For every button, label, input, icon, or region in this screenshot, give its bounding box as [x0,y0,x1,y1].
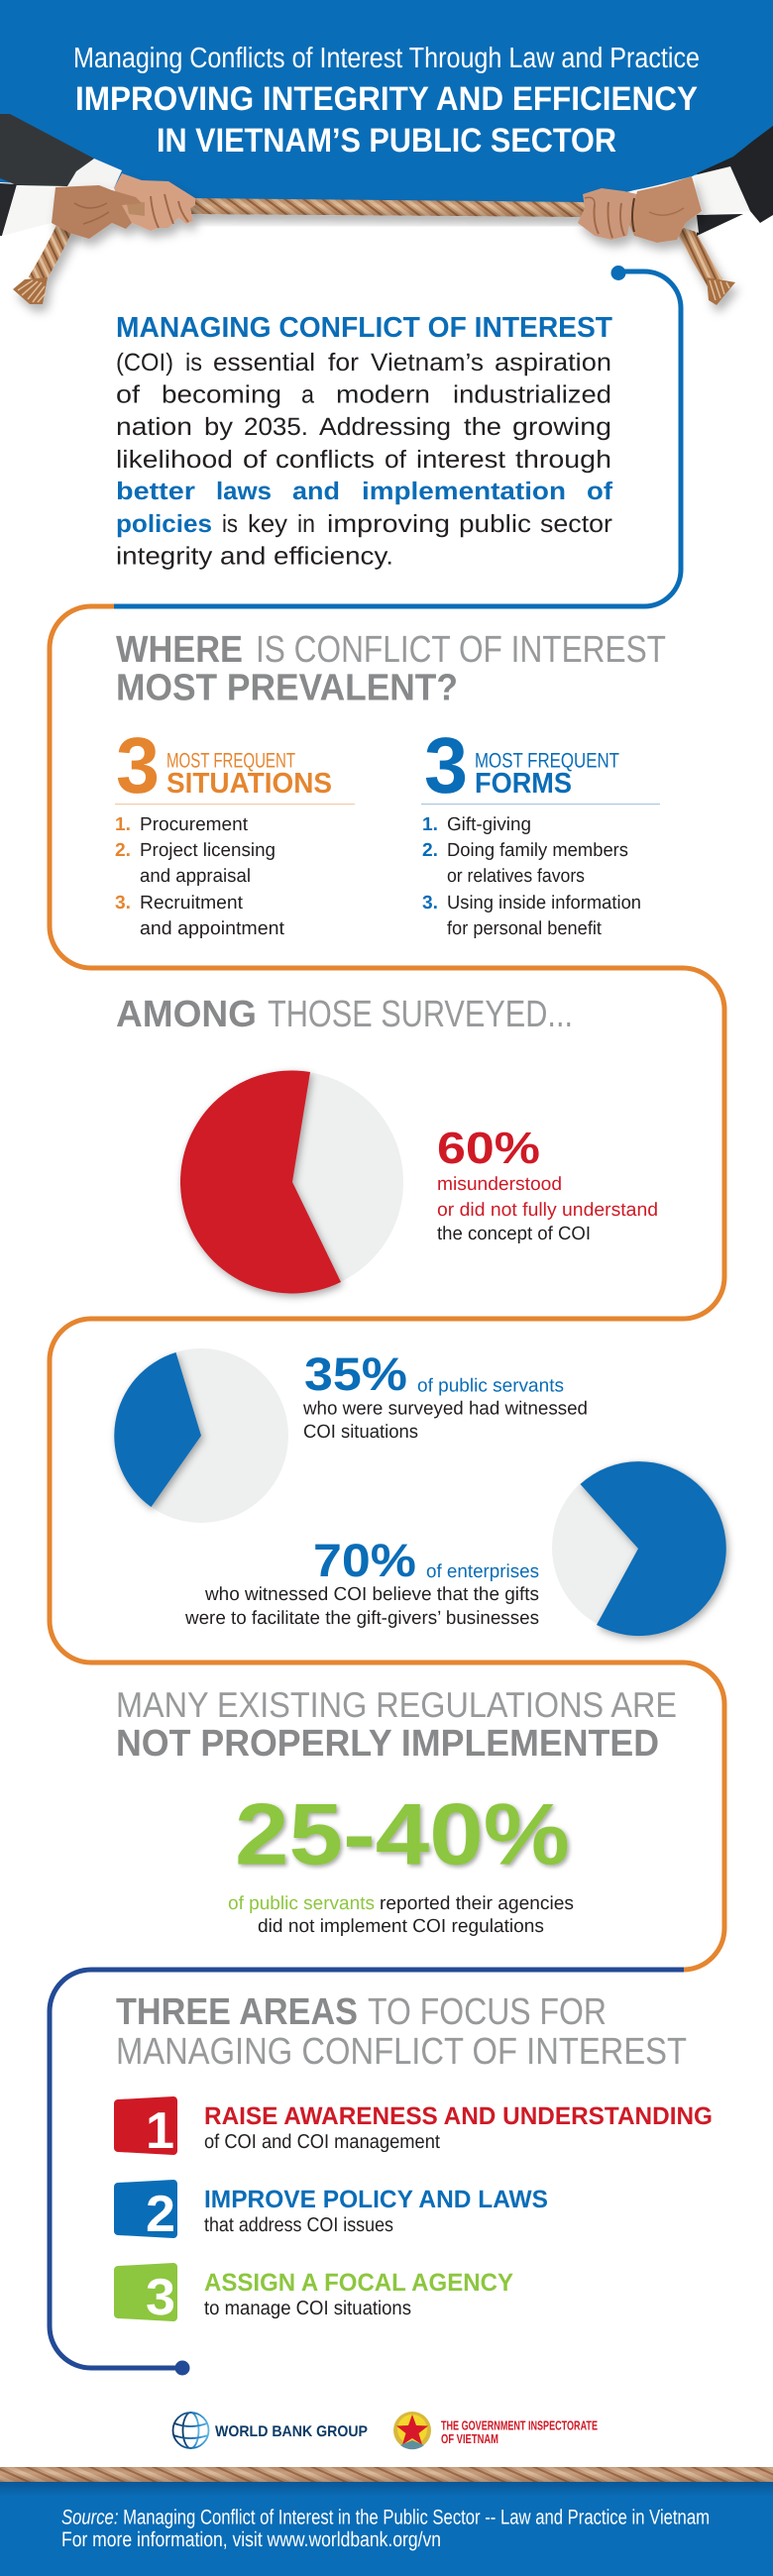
intro text block: policies [116,510,212,538]
callout: 35 percent: of public servants [417,1375,564,1397]
focus item 3 [118,2267,513,2326]
heading: regulations not implemented [116,1684,677,1765]
intro text block: conflicts [276,446,375,474]
connector line: blue, intro panel [114,266,681,606]
heading: regulations not implemented: MANY EXISTING REGULATIONS ARE [116,1684,677,1725]
pie chart: 60 percent [180,1070,403,1293]
callout: 60 percent: or did not fully understand [437,1200,658,1221]
intro text block: laws [216,478,272,505]
callout: 70 percent: 70% [313,1534,416,1586]
callout: 70 percent: were to facilitate the gift-givers’ businesses [184,1608,539,1629]
focus item 2: that address COI issues [204,2214,393,2236]
intro text block: likelihood [116,446,233,474]
header titles [73,43,700,160]
focus item 1: 1 [146,2102,174,2160]
column: 3 most frequent situations: Procurement [140,814,249,835]
column: 3 most frequent situations: MOST FREQUENT [166,749,295,773]
logo: Government Inspectorate of Vietnam: THE GOVERNMENT INSPECTORATE [441,2418,598,2433]
column: 3 most frequent situations [115,721,355,939]
intro text block: is [222,510,238,538]
main rope [188,198,585,217]
heading: where is COI most prevalent [116,629,666,709]
intro text block: and [292,478,340,505]
intro text block: Addressing [319,413,451,441]
column: 3 most frequent situations: and appraisal [140,866,251,887]
heading: three areas to focus: TO FOCUS FOR [368,1991,607,2033]
focus item 3: ASSIGN A FOCAL AGENCY [204,2269,513,2297]
pie chart: 70 percent [552,1460,726,1636]
focus item 3: 3 [146,2269,175,2326]
callout: 60 percent [437,1123,658,1244]
column: 3 most frequent forms: Using inside information [447,893,641,913]
callout: 35 percent: COI situations [303,1422,418,1443]
column: 3 most frequent situations: SITUATIONS [166,768,332,800]
column: 3 most frequent forms: FORMS [475,768,572,800]
pie chart: 35 percent [114,1348,288,1523]
intro text block: sector [540,510,612,538]
column: 3 most frequent forms: 3 [424,721,468,809]
intro text block: industrialized [453,380,611,408]
focus item 1: of COI and COI management [204,2131,440,2153]
logo: World Bank Group: WORLD BANK GROUP [215,2423,368,2440]
column: 3 most frequent forms: MOST FREQUENT [475,749,619,773]
heading: regulations not implemented: NOT PROPERLY IMPLEMENTED [116,1723,659,1765]
callout: 35 percent: 35% [304,1347,407,1400]
connector line: orange, middle panels [50,606,724,1970]
intro text block: 2035. [244,413,308,441]
intro text block: of [243,446,267,474]
stat caption: reported their agencies [380,1893,574,1914]
intro text block: in [297,510,315,538]
intro text block: the [464,413,501,441]
big stat: 25-40 percent: 25-40% [235,1785,570,1882]
intro text block: MANAGING CONFLICT OF INTEREST [116,312,612,344]
intro text block: modern [336,380,430,408]
column: 3 most frequent forms: 2. [422,840,438,861]
header titles: IMPROVING INTEGRITY AND EFFICIENCY [75,80,698,118]
logo: Government Inspectorate of Vietnam: OF VIETNAM [441,2431,498,2446]
intro text block: for [328,349,359,376]
heading: three areas to focus: THREE AREAS [116,1991,358,2033]
focus item 1: RAISE AWARENESS AND UNDERSTANDING [204,2102,713,2130]
heading: where is COI most prevalent: IS CONFLICT OF INTEREST [256,629,666,671]
intro text block [116,312,613,571]
column: 3 most frequent forms: 1. [422,814,438,835]
callout: 60 percent: 60% [437,1123,540,1173]
column: 3 most frequent situations: 3 [116,721,160,809]
callout: 70 percent: of enterprises [426,1561,539,1582]
column: 3 most frequent forms: Doing family members [447,840,628,861]
heading: among those surveyed: THOSE SURVEYED... [268,994,573,1035]
focus item 3: to manage COI situations [204,2298,411,2319]
intro text block: better [116,478,195,505]
focus item 2: IMPROVE POLICY AND LAWS [204,2186,548,2213]
callout: 60 percent: misunderstood [437,1174,562,1195]
column: 3 most frequent situations: 3. [115,893,131,913]
focus item 2 [118,2184,548,2243]
intro text block: through [515,446,611,474]
callout: 70 percent [184,1534,539,1629]
intro text block: aspiration [495,349,611,376]
stat caption: of public servants [228,1893,375,1914]
right rope tail [684,228,735,305]
header titles: IN VIETNAM’S PUBLIC SECTOR [157,122,616,160]
footer source text: For more information, visit www.worldbank.org/vn [61,2528,441,2551]
intro text block: (COI) [116,349,173,376]
logo: Government Inspectorate of Vietnam [393,2412,598,2449]
footer source text [61,2507,710,2551]
callout: 70 percent: who witnessed COI believe that the gifts [204,1584,539,1605]
intro text block: essential [213,349,315,376]
intro text block: improving [327,510,450,538]
heading: among those surveyed: AMONG [116,994,257,1035]
column: 3 most frequent forms: for personal benefit [447,918,603,939]
stat caption [228,1893,574,1937]
intro text block: is [185,349,202,376]
callout: 60 percent: the concept of COI [437,1224,591,1244]
column: 3 most frequent situations: 1. [115,814,131,835]
column: 3 most frequent forms: 3. [422,893,438,913]
left arms and hands [0,114,195,239]
intro text block: growing [512,413,611,441]
column: 3 most frequent situations: and appointment [140,918,285,939]
intro text block: of [587,478,613,505]
intro text block: of [116,380,140,408]
intro text block: interest [416,446,505,474]
intro text block: Vietnam’s [371,349,484,376]
heading: among those surveyed [116,994,573,1035]
intro text block: becoming [162,380,281,408]
intro text block: of [385,446,406,474]
column: 3 most frequent forms: Gift-giving [447,814,531,835]
column: 3 most frequent situations: Project licensing [140,840,276,861]
logo: World Bank Group [172,2413,368,2448]
intro text block: implementation [362,478,566,505]
heading: three areas to focus: MANAGING CONFLICT OF INTEREST [116,2031,687,2073]
column: 3 most frequent forms: or relatives favors [447,866,585,887]
intro text block: by [204,413,234,441]
right arms and hands [578,126,773,243]
intro text block: a [301,380,314,408]
column: 3 most frequent situations: Recruitment [140,893,244,913]
focus item 1 [118,2100,713,2160]
left rope tail [13,226,65,304]
intro text block: public [459,510,531,538]
callout: 35 percent: who were surveyed had witnessed [302,1399,588,1419]
focus item 2: 2 [146,2186,175,2243]
intro text block: key [248,510,288,538]
heading: where is COI most prevalent: WHERE [116,629,243,671]
intro text block: nation [116,413,192,441]
intro text block: integrity and efficiency. [116,543,393,571]
header banner [0,0,773,203]
heading: three areas to focus [116,1991,687,2073]
footer rope [0,2467,773,2482]
stat caption: did not implement COI regulations [258,1916,544,1937]
footer band [0,2479,773,2576]
column: 3 most frequent forms [421,721,660,939]
column: 3 most frequent situations: 2. [115,840,131,861]
callout: 35 percent [302,1347,588,1443]
heading: where is COI most prevalent: MOST PREVALENT? [116,668,458,709]
connector line: navy, focus panel [50,1970,684,2376]
